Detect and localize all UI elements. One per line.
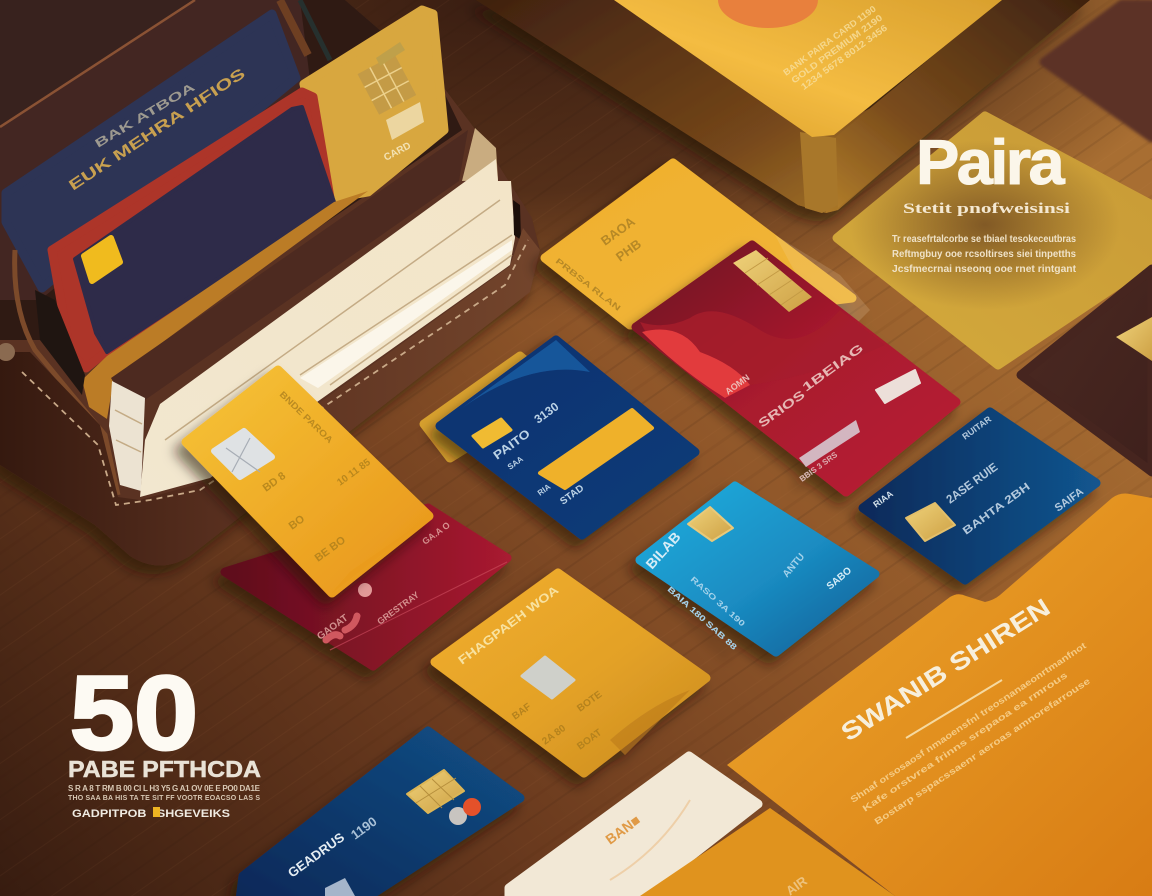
golden card with silver chip: 2A 80: [540, 723, 568, 747]
golden card with silver chip: BOTE: [575, 689, 605, 714]
front leather: [0, 228, 540, 566]
gold card in wallet: CARD: [382, 140, 413, 164]
yellow card, upper centre: PHB: [613, 236, 644, 264]
red card, under yellow: GAOAT: [315, 613, 350, 642]
subheading: Stetit pnofweisinsi: [903, 201, 1070, 217]
yellow card with silver chip: BE BO: [313, 534, 348, 564]
blue card with yellow pill: 3130: [532, 399, 562, 426]
paper stack: [109, 159, 515, 497]
description text: [892, 234, 1077, 275]
heading: Paira: Paira: [916, 128, 1066, 198]
dark gap: [513, 200, 521, 240]
blue card with yellow pill: [440, 340, 695, 535]
yellow card with silver chip: BD 8: [261, 470, 288, 494]
cyan card: BAIA 180 SAB 88: [666, 585, 739, 652]
tan edge behind paper: [462, 128, 498, 181]
blue card with yellow pill: RIA: [536, 482, 553, 498]
crimson card with gold chip: BBIS 3 SRS: [798, 450, 840, 484]
label fine print: [68, 784, 261, 802]
wallet snap: [0, 343, 15, 361]
panel body text: Bostarp sspacssaenr aeroas amnorefarrouse: [873, 676, 1092, 827]
label fine print: THO SAA BA HIS TA TE SIT FF VOOTR EOACSO LAS S: [68, 795, 260, 802]
blue card, right: 2ASE RUIE: [944, 460, 1000, 506]
cyan card: [640, 486, 875, 652]
blue card with yellow pill: SAA: [506, 454, 525, 472]
cyan card: RASO 3A 190: [689, 575, 747, 629]
cyan card: ANTU: [781, 552, 807, 580]
footer label with gold marker: GADPITPOB SHGEVEIKS: [72, 808, 230, 820]
golden card with silver chip: [435, 573, 706, 773]
wallet: [0, 0, 540, 566]
gold box top: 1234 5678 8012 3456: [799, 23, 889, 92]
navy card, bottom: 1190: [348, 814, 380, 842]
yellow card with silver chip: BNDE PAROA: [278, 389, 335, 445]
large orange panel: [727, 494, 1152, 896]
gold card in wallet: [304, 10, 444, 198]
red card with dark panel: [52, 92, 334, 368]
description text: Tr reasefrtalcorbe se tbiael tesokeceutbras: [892, 234, 1076, 245]
blue card, right: [863, 412, 1096, 580]
yellow card with silver chip: [186, 370, 429, 593]
navy card in wallet: BAK ATBOA: [92, 80, 198, 151]
orange inner sleeve: [82, 191, 368, 419]
crimson card with gold chip: [636, 245, 956, 492]
yellow card, upper centre: BAOA: [598, 213, 638, 248]
navy card in wallet: [6, 14, 296, 288]
panel rule: [906, 680, 1002, 738]
white and orange card, bottom: BAN■: [602, 812, 643, 847]
cyan card: SABO: [825, 565, 854, 592]
red card, under yellow: GA.A O: [420, 520, 452, 547]
panel body text: Kafe orstvrea frinns srepaoa ea rmrous: [861, 670, 1069, 814]
blue card, right: BAHTA 2BH: [961, 481, 1033, 537]
blue card, right: RUITAR: [960, 414, 994, 442]
blue card, right: RIAA: [871, 488, 895, 510]
top right maroon card: [1044, 4, 1152, 138]
panel body text: Shnaf orsosaosf nmaoensfnl treosnanaeonrtmanfnot: [849, 640, 1088, 805]
golden card with silver chip: BOAT: [575, 727, 604, 752]
gold box top: BANK PAIRA CARD 1190: [781, 4, 878, 78]
blue card with yellow pill: STAD: [558, 483, 586, 507]
yellow card with silver chip: BO: [287, 513, 307, 532]
navy card in wallet: EUK MEHRA HFIOS: [66, 65, 248, 194]
navy card, bottom: [240, 731, 520, 896]
navy card, bottom: GEADRUS: [285, 829, 347, 880]
yellow card behind blue: [424, 356, 560, 458]
brown pocket: [111, 130, 468, 430]
large gold card, right: [837, 116, 1152, 365]
yellow card, upper centre: PRBSA RLAN: [554, 256, 623, 313]
left strap: [15, 250, 118, 495]
gold box top: GOLD PREMIUM 2190: [789, 13, 884, 85]
label: PABE PFTHCDA: PABE PFTHCDA: [68, 756, 261, 782]
yellow card, upper centre: [545, 163, 870, 330]
golden card with silver chip: FHAGPAEH WOA: [455, 583, 562, 667]
blue card, right: SAIFA: [1053, 486, 1086, 514]
gold box top: [476, 0, 1090, 213]
crimson card with gold chip: AOMN: [723, 372, 751, 397]
cyan card: BILAB: [642, 529, 684, 572]
blue card with yellow pill: PAITO: [491, 426, 533, 462]
crimson card with gold chip: 1BEIAG: [800, 341, 866, 394]
crimson card with gold chip: SRIOS: [756, 387, 807, 430]
description text: Reftmgbuy ooe rcsoltirses siei tinpetths: [892, 249, 1076, 260]
big number 50: 50: [70, 655, 198, 772]
panel body text: [849, 640, 1092, 827]
red card, under yellow: GRESTRAY: [375, 590, 421, 627]
yellow card with silver chip: 10 11 85: [335, 457, 373, 488]
wallet back: [0, 0, 540, 566]
stitching: [22, 240, 528, 505]
description text: Jcsfmecrnai nseonq ooe rnet rintgant: [892, 264, 1077, 275]
golden card with silver chip: BAF: [510, 701, 533, 722]
right maroon card with chip: [1021, 269, 1152, 472]
white and orange card, bottom: [509, 756, 895, 896]
red card, under yellow: [225, 508, 507, 666]
panel heading: SWANIB SHIREN: [836, 593, 1055, 747]
label fine print: S R A 8 T RM B 00 CI L H3 Y5 G A1 OV 0E E PO0 DA1E: [68, 784, 261, 793]
